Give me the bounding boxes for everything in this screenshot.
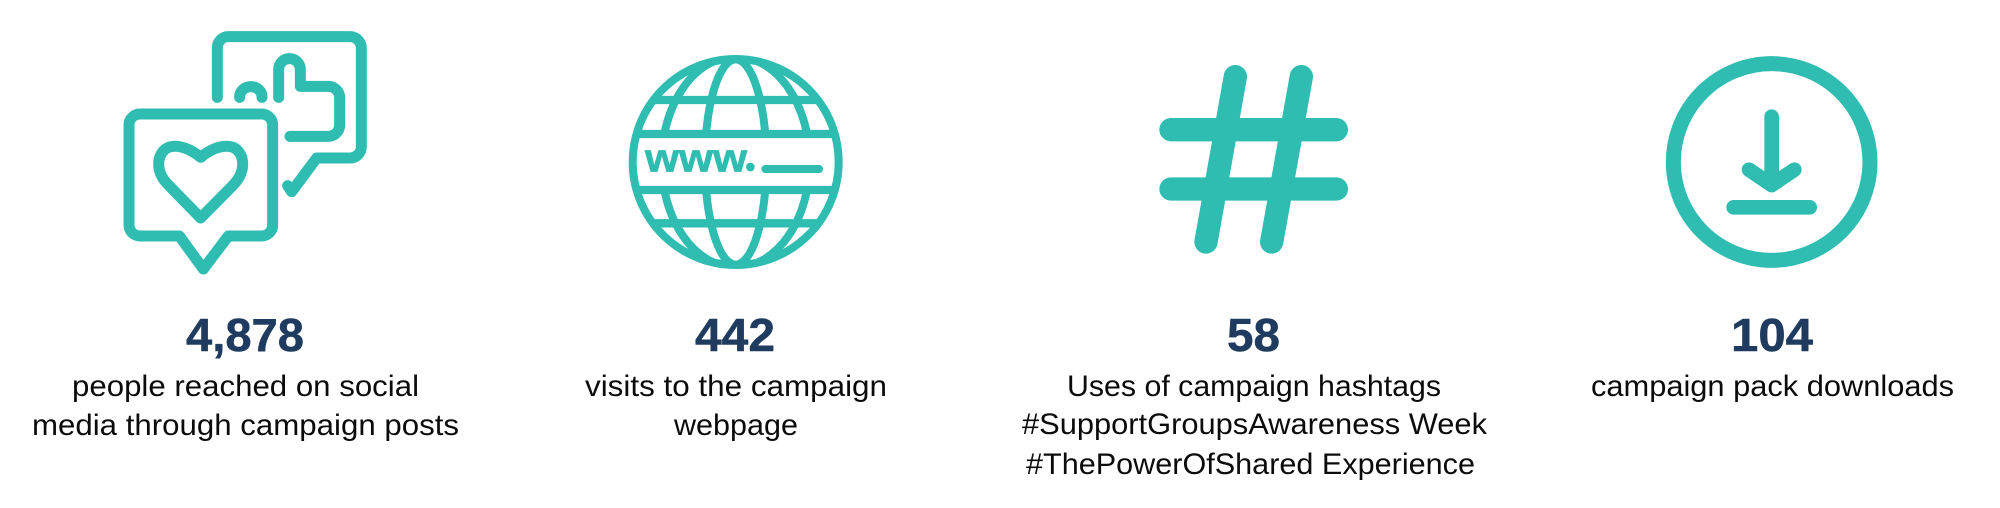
description: webpage visits: visits to the campaign <box>585 370 887 403</box>
number: 442: 442 <box>695 309 775 361</box>
number: 4,878: 4,878 <box>186 309 304 361</box>
icon: globe with www: www <box>644 136 748 180</box>
description: webpage visits <box>585 370 887 442</box>
description: campaign hashtags: #SupportGroupsAwareness Week <box>1022 408 1488 441</box>
panel: webpage visits <box>585 57 887 442</box>
description: people reached: people reached on social <box>72 370 419 403</box>
icon: speech bubbles with heart and thumbs up <box>129 37 361 269</box>
description: campaign hashtags: #ThePowerOfShared Experience <box>1026 448 1475 481</box>
description: people reached <box>32 370 459 442</box>
number: 104: 104 <box>1731 309 1813 361</box>
description: campaign hashtags <box>1022 370 1488 481</box>
description: webpage visits: webpage <box>673 409 798 442</box>
panel: campaign pack downloads <box>1591 64 1954 403</box>
icon: hashtag <box>1171 77 1336 242</box>
panel: hashtag uses <box>1022 77 1488 481</box>
number: 58: 58 <box>1227 309 1280 361</box>
panel: social media reach <box>32 37 459 442</box>
icon: globe with www <box>623 57 850 267</box>
icon: download in circle <box>1673 64 1870 260</box>
description: people reached: media through campaign posts <box>32 409 459 442</box>
description: downloads: campaign pack downloads <box>1591 370 1954 403</box>
description: campaign hashtags: Uses of campaign hashtags <box>1067 370 1441 403</box>
